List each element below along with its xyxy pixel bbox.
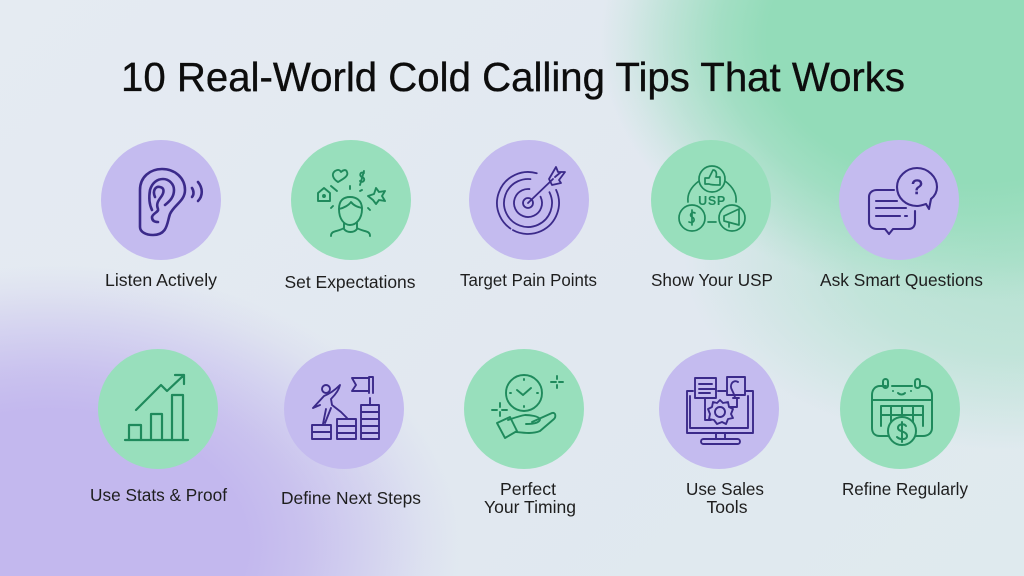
tip 5: Ask Smart Questions [820, 140, 983, 290]
title: 10 Real-World Cold Calling Tips That Works [121, 54, 905, 100]
label: Define Next Steps [281, 488, 421, 508]
icon: climbing to flag [312, 377, 379, 439]
label: Listen Actively [105, 270, 217, 290]
tip 8: Perfect Your Timing [464, 349, 584, 517]
label line 2: Tools [706, 497, 748, 517]
label: Set Expectations [284, 272, 416, 292]
tip 9: Use Sales Tools [659, 349, 779, 517]
icon: ear [140, 169, 202, 235]
label: Ask Smart Questions [820, 270, 983, 290]
tip 3: Target Pain Points [460, 140, 597, 290]
tip 10: Refine Regularly [840, 349, 968, 499]
icon text: USP [698, 194, 726, 208]
tip 2: Set Expectations [284, 140, 416, 292]
icon: target with arrow [487, 162, 569, 244]
tip 7: Define Next Steps [281, 349, 421, 508]
icon: calendar with dollar [872, 379, 932, 445]
label: Perfect [500, 479, 556, 499]
label: Show Your USP [651, 270, 773, 290]
label: Use Sales [686, 479, 764, 499]
icon: person with ideas [318, 170, 385, 236]
tip 4: Show Your USP [651, 140, 773, 290]
label: Use Stats & Proof [90, 485, 227, 505]
icon: clock over hand [492, 375, 563, 438]
tip 6: Use Stats & Proof [90, 349, 227, 505]
label: Refine Regularly [842, 479, 968, 499]
icon text: ? [911, 176, 923, 199]
icon: growth chart [125, 375, 188, 440]
label: Target Pain Points [460, 270, 597, 290]
label line 2: Your Timing [484, 497, 576, 517]
tip 1: Listen Actively [101, 140, 221, 290]
icon: USP triangle [679, 166, 745, 231]
icon: monitor with tools [687, 377, 753, 444]
icon: speech bubbles [869, 168, 937, 234]
